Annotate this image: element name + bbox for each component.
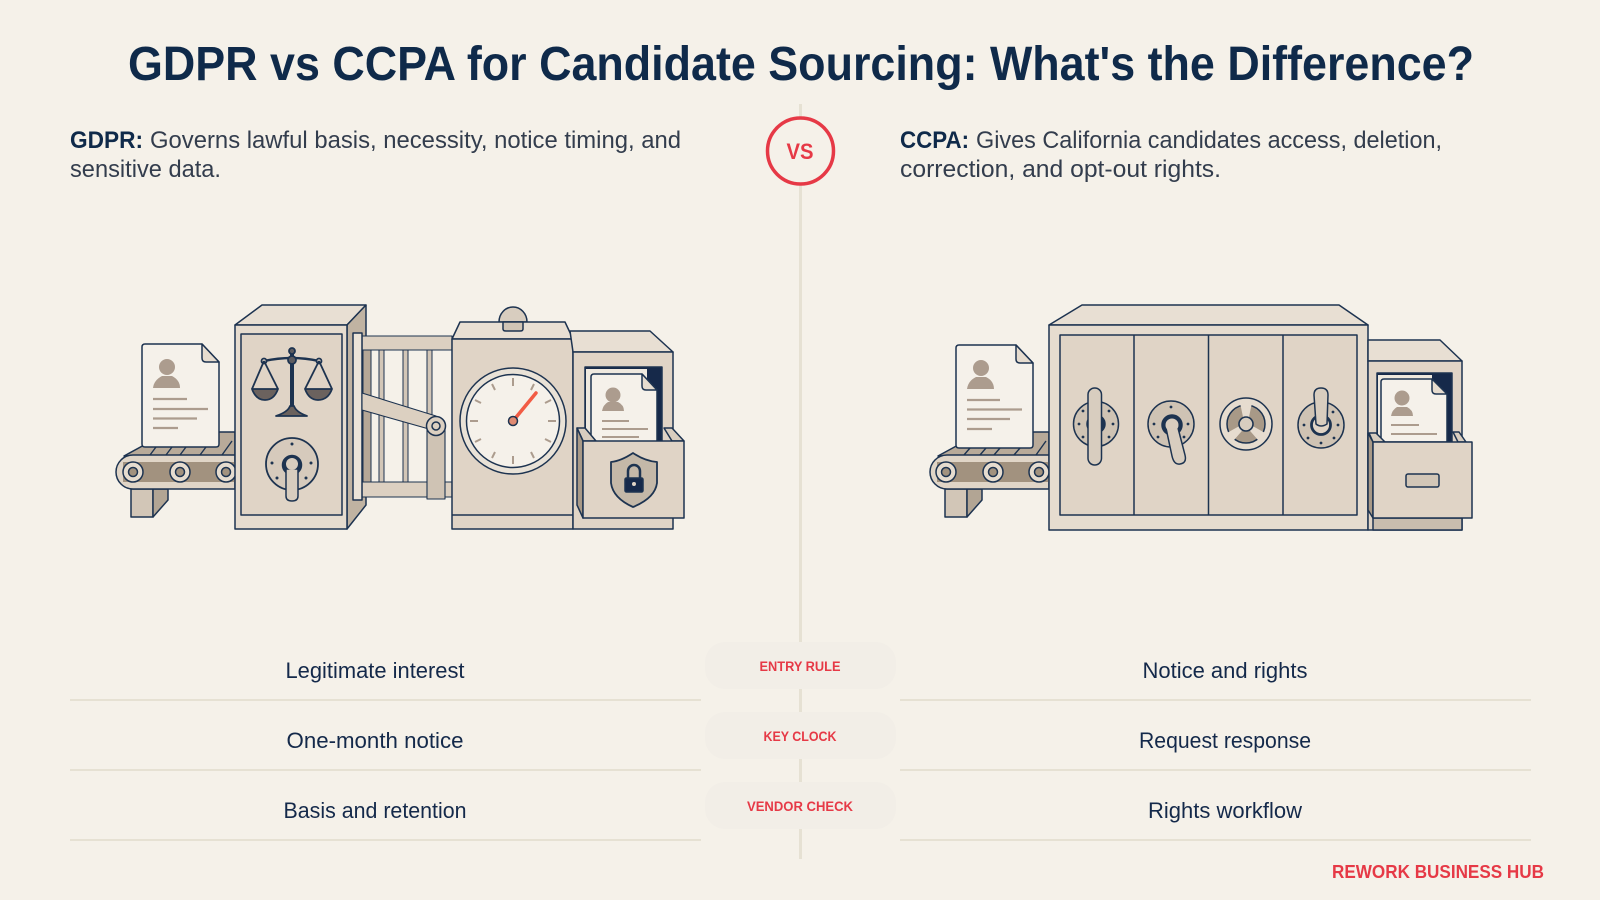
file cabinet [570,331,673,529]
candidate document [142,344,219,447]
comparison row: entry rule: Notice and rights [1142,658,1308,683]
comparison row: key clock [70,712,1531,771]
title: GDPR vs CCPA for Candidate Sourcing: What's the Difference? [128,38,1474,91]
brand footer: REWORK BUSINESS HUB [1332,862,1544,882]
illustration: GDPR machine [116,305,684,529]
open drawer [1368,432,1472,530]
GDPR description: Governs lawful basis, necessity, notice timing, and [150,127,681,154]
open drawer with shield [577,428,684,518]
comparison row: vendor check [70,782,1531,841]
illustration: CCPA machine [930,305,1472,530]
comparison row: key clock: One-month notice [286,728,464,753]
CCPA description: Gives California candidates access, deletion, [976,127,1442,154]
vs badge: VS [786,139,814,164]
filed document [1381,379,1447,442]
GDPR description: GDPR: [70,127,143,154]
filed document [591,374,657,442]
conveyor with rollers [930,432,1049,517]
main cabinet with panels [1049,305,1368,530]
GDPR description [70,127,681,183]
clock cabinet [452,307,573,529]
gate with bars and arm [353,333,452,500]
CCPA description: correction, and opt-out rights. [900,156,1221,183]
icon: shield with padlock [611,453,657,507]
knob 4 [1298,388,1344,448]
icon: clock gauge [460,368,566,474]
candidate document [956,345,1033,448]
comparison row: vendor check: Rights workflow [1148,798,1302,823]
center divider [799,104,802,859]
icon: scales of justice [252,348,332,416]
knob 2 [1148,401,1194,464]
comparison row: key clock: Request response [1139,728,1311,753]
CCPA description [900,127,1442,183]
comparison row: key clock: KEY CLOCK [764,729,837,744]
comparison row: entry rule [70,642,1531,701]
conveyor with rollers [116,432,236,517]
comparison row: vendor check: Basis and retention [284,798,466,823]
GDPR description: sensitive data. [70,156,221,183]
comparison row: entry rule: Legitimate interest [286,658,464,683]
CCPA description: CCPA: [900,127,969,154]
vs badge [768,118,834,184]
knob 1 [1074,388,1118,465]
comparison row: vendor check: VENDOR CHECK [747,799,853,814]
scales and lock cabinet [235,305,366,529]
file cabinet [1368,340,1462,530]
comparison row: entry rule: ENTRY RULE [760,659,840,674]
knob 3: wheel [1220,398,1272,450]
icon: keyhole dial [266,438,318,501]
